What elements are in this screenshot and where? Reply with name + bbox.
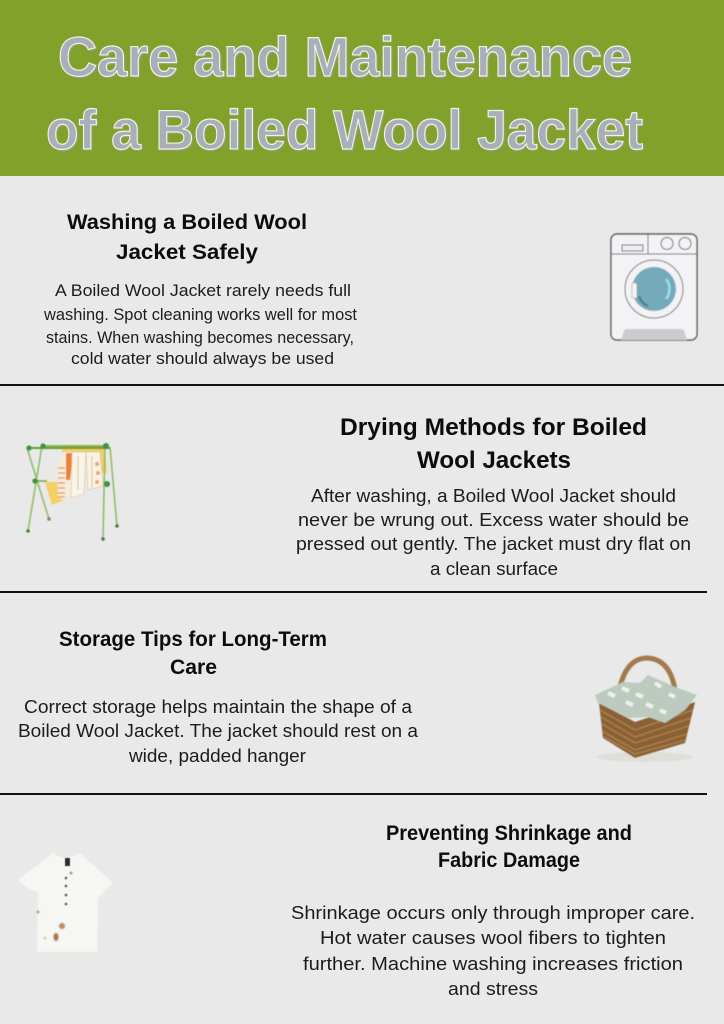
title: Care and Maintenance bbox=[58, 25, 632, 88]
text: shrinkage body: Shrinkage occurs only through improper care. bbox=[291, 903, 695, 923]
heading: shrinkage: Preventing Shrinkage and bbox=[386, 822, 632, 845]
text: drying body bbox=[296, 486, 691, 579]
text: shrinkage body: further. Machine washing increases friction bbox=[303, 954, 683, 974]
icon: laundry basket bbox=[595, 658, 697, 762]
text: shrinkage body: and stress bbox=[448, 979, 538, 999]
panel: storage bbox=[18, 628, 697, 766]
text: drying body: pressed out gently. The jacket must dry flat on bbox=[296, 534, 691, 554]
heading: washing: Washing a Boiled Wool bbox=[67, 211, 307, 234]
text: washing body: stains. When washing becomes necessary, bbox=[46, 328, 354, 347]
text: drying body: never be wrung out. Excess water should be bbox=[298, 510, 689, 530]
text: washing body: cold water should always be used bbox=[71, 349, 334, 368]
heading: drying: Drying Methods for Boiled bbox=[340, 414, 647, 441]
text: drying body: a clean surface bbox=[430, 559, 558, 579]
heading: washing: Jacket Safely bbox=[116, 241, 258, 264]
text: storage body: wide, padded hanger bbox=[128, 746, 306, 766]
heading: shrinkage: Fabric Damage bbox=[438, 849, 580, 872]
heading: storage: Care bbox=[170, 656, 217, 679]
heading: washing bbox=[67, 211, 307, 264]
panel: washing bbox=[43, 211, 697, 368]
icon: drying rack bbox=[26, 443, 119, 541]
header banner bbox=[0, 0, 724, 176]
text: storage body bbox=[18, 697, 419, 766]
icon: washing machine bbox=[611, 234, 697, 340]
text: storage body: Correct storage helps maintain the shape of a bbox=[24, 697, 413, 717]
divider bbox=[0, 591, 707, 593]
heading: storage bbox=[59, 628, 327, 679]
heading: drying bbox=[340, 414, 647, 474]
heading: drying: Wool Jackets bbox=[417, 447, 571, 474]
text: storage body: Boiled Wool Jacket. The jacket should rest on a bbox=[18, 721, 419, 741]
panel: drying bbox=[26, 414, 691, 579]
divider bbox=[0, 384, 724, 386]
text: washing body: A Boiled Wool Jacket rarely needs full bbox=[55, 281, 351, 300]
title bbox=[46, 25, 643, 161]
heading: shrinkage bbox=[386, 822, 632, 872]
divider bbox=[0, 793, 707, 795]
text: drying body: After washing, a Boiled Wool Jacket should bbox=[311, 486, 676, 506]
title: of a Boiled Wool Jacket bbox=[46, 98, 643, 161]
icon: stained t-shirt bbox=[18, 853, 113, 952]
heading: storage: Storage Tips for Long-Term bbox=[59, 628, 327, 651]
text: washing body: washing. Spot cleaning works well for most bbox=[43, 305, 357, 324]
text: washing body bbox=[43, 281, 357, 368]
text: shrinkage body: Hot water causes wool fibers to tighten bbox=[320, 928, 666, 948]
panel: shrinkage bbox=[18, 822, 695, 999]
text: shrinkage body bbox=[291, 903, 695, 999]
